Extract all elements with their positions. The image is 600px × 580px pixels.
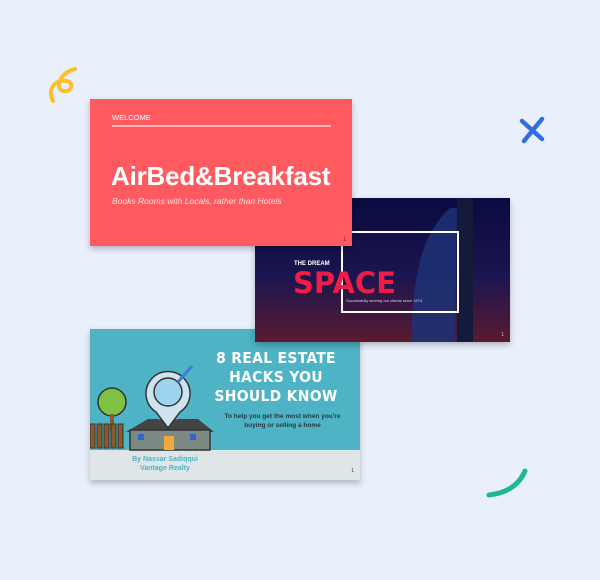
subtitle: Books Rooms with Locals, rather than Hotels [112,196,282,206]
slide: dream space: SPACE [293,266,396,300]
slide: airbed [90,99,352,246]
slide: airbed: 1 [343,237,346,243]
title: AirBed&Breakfast [111,161,330,191]
slide: dream space [255,198,510,342]
author: By Nassar Sadiqqui [132,456,198,463]
title: 8 REAL ESTATE HACKS YOU SHOULD KNOW [214,349,338,405]
decoration: yellow squiggle [48,67,77,104]
slide: real estate: 1 [351,468,354,474]
welcome: WELCOME [112,113,151,122]
frame [341,231,459,313]
author: Vantage Realty [140,465,190,472]
decoration: blue x [520,116,544,144]
illustration: house with magnifier [90,365,214,451]
slide: dream space: 1 [501,332,504,338]
heading: THE DREAM [294,261,330,267]
author [132,456,198,472]
slide: real estate [90,329,360,480]
decoration: green swoosh [486,468,528,498]
subtitle: To help you get the most when you're buying or selling a home [225,413,340,429]
slide: dream space: Successfully serving our clients since 1974 [346,298,422,303]
building [411,198,473,342]
footer band [90,450,360,480]
